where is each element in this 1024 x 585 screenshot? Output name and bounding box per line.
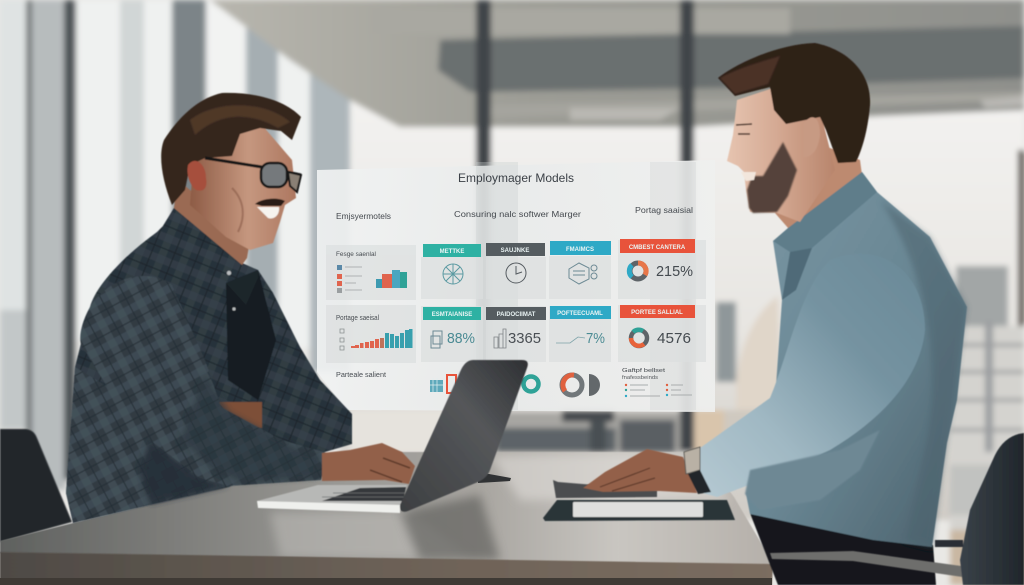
watch xyxy=(684,447,700,474)
icon: wheel xyxy=(443,264,463,284)
lower torso with folds xyxy=(66,367,229,523)
hair xyxy=(718,43,870,163)
card headers, row one: SAUJNKE xyxy=(501,248,529,254)
panel title: Employmager Models xyxy=(458,171,574,185)
card headers, row two: ESMTAIANISE xyxy=(432,312,472,318)
ear xyxy=(803,117,820,157)
left card, row one xyxy=(336,251,407,293)
man on the right xyxy=(583,43,967,585)
left chair xyxy=(0,429,72,542)
stat: 3365 xyxy=(494,329,541,348)
card headers, row one: FMAIMCS xyxy=(566,247,594,253)
keyboard xyxy=(322,487,406,501)
donut and 4576 xyxy=(631,330,691,347)
sleeve xyxy=(699,254,925,497)
column headings: Emjsyermotels xyxy=(336,211,391,221)
icon: teal ring xyxy=(524,376,538,392)
translucent panel background xyxy=(317,160,715,412)
card headers, row one: METTKE xyxy=(440,249,464,255)
mullion reflections xyxy=(476,162,518,410)
torso with plaid shirt xyxy=(66,208,352,523)
donut and 215% xyxy=(629,263,693,280)
table front edge xyxy=(0,552,773,585)
icon: donut xyxy=(562,375,582,395)
donut and 215%: 215% xyxy=(656,263,693,280)
icon: hexagon with circles xyxy=(569,263,597,284)
icon: building and red square xyxy=(430,375,456,393)
laptop xyxy=(257,360,528,513)
card headers, row one: CMBEST CANTERA xyxy=(629,245,686,251)
ear xyxy=(187,161,206,191)
stat: 7%: 7% xyxy=(586,330,605,347)
icon: half circle xyxy=(589,374,600,396)
stat: 88% xyxy=(431,330,475,348)
donut and 4576: 4576 xyxy=(657,330,691,347)
forearm skin under the sleeve xyxy=(218,402,262,428)
near sleeve xyxy=(80,276,327,486)
laptop lid xyxy=(400,360,528,512)
man on the left xyxy=(66,93,415,523)
neck xyxy=(775,140,862,236)
left card, row two: bar chart xyxy=(336,315,412,350)
legend block: fnafessbeinds xyxy=(622,375,658,381)
bottom row heading: Parteale salient xyxy=(336,372,386,379)
glasses xyxy=(205,158,301,175)
right chair xyxy=(770,433,1024,585)
laptop base xyxy=(257,485,407,506)
row cards xyxy=(326,240,706,363)
tabletop xyxy=(0,452,773,566)
stat: 88%: 88% xyxy=(447,330,475,347)
collar xyxy=(773,172,877,258)
head xyxy=(190,125,296,250)
column headings: Consuring nalc softwer Marger xyxy=(454,209,581,219)
neck xyxy=(174,180,250,265)
icon: clock xyxy=(506,263,526,283)
desk mat with paper xyxy=(543,500,735,521)
tablet under the hand xyxy=(553,480,657,498)
column headings: Portag saaisial xyxy=(635,205,693,215)
small device behind the laptop xyxy=(478,472,511,483)
column headings xyxy=(336,205,693,221)
eye and brow xyxy=(736,124,752,134)
hair xyxy=(161,93,301,205)
card headers, row two: PAIDOCIIMAT xyxy=(497,312,536,318)
left card, row two: bar chart: Portage saeisal xyxy=(336,315,379,322)
chair back xyxy=(960,433,1024,585)
dashboard panel: Employmager Models xyxy=(317,160,715,412)
chair arm xyxy=(770,551,990,581)
left card, row one: Fesge saenlal xyxy=(336,251,377,258)
table highlight xyxy=(270,512,470,558)
beard xyxy=(747,142,797,213)
hand on the laptop xyxy=(322,443,415,484)
stat: 7% xyxy=(556,330,605,347)
legend block xyxy=(622,368,692,397)
card headers, row two xyxy=(423,305,695,320)
head xyxy=(727,85,835,222)
card headers, row two: POFTEECUAML xyxy=(557,311,603,317)
hand xyxy=(583,449,697,493)
card headers, row one xyxy=(423,239,695,257)
trousers xyxy=(750,513,936,585)
moustache and smile xyxy=(255,199,285,206)
card headers, row two: PORTEE SALLIAL xyxy=(631,310,683,316)
shirt body xyxy=(746,172,967,547)
stat: 3365: 3365 xyxy=(508,330,541,347)
legend block: Gaftpf bellset xyxy=(622,368,665,374)
